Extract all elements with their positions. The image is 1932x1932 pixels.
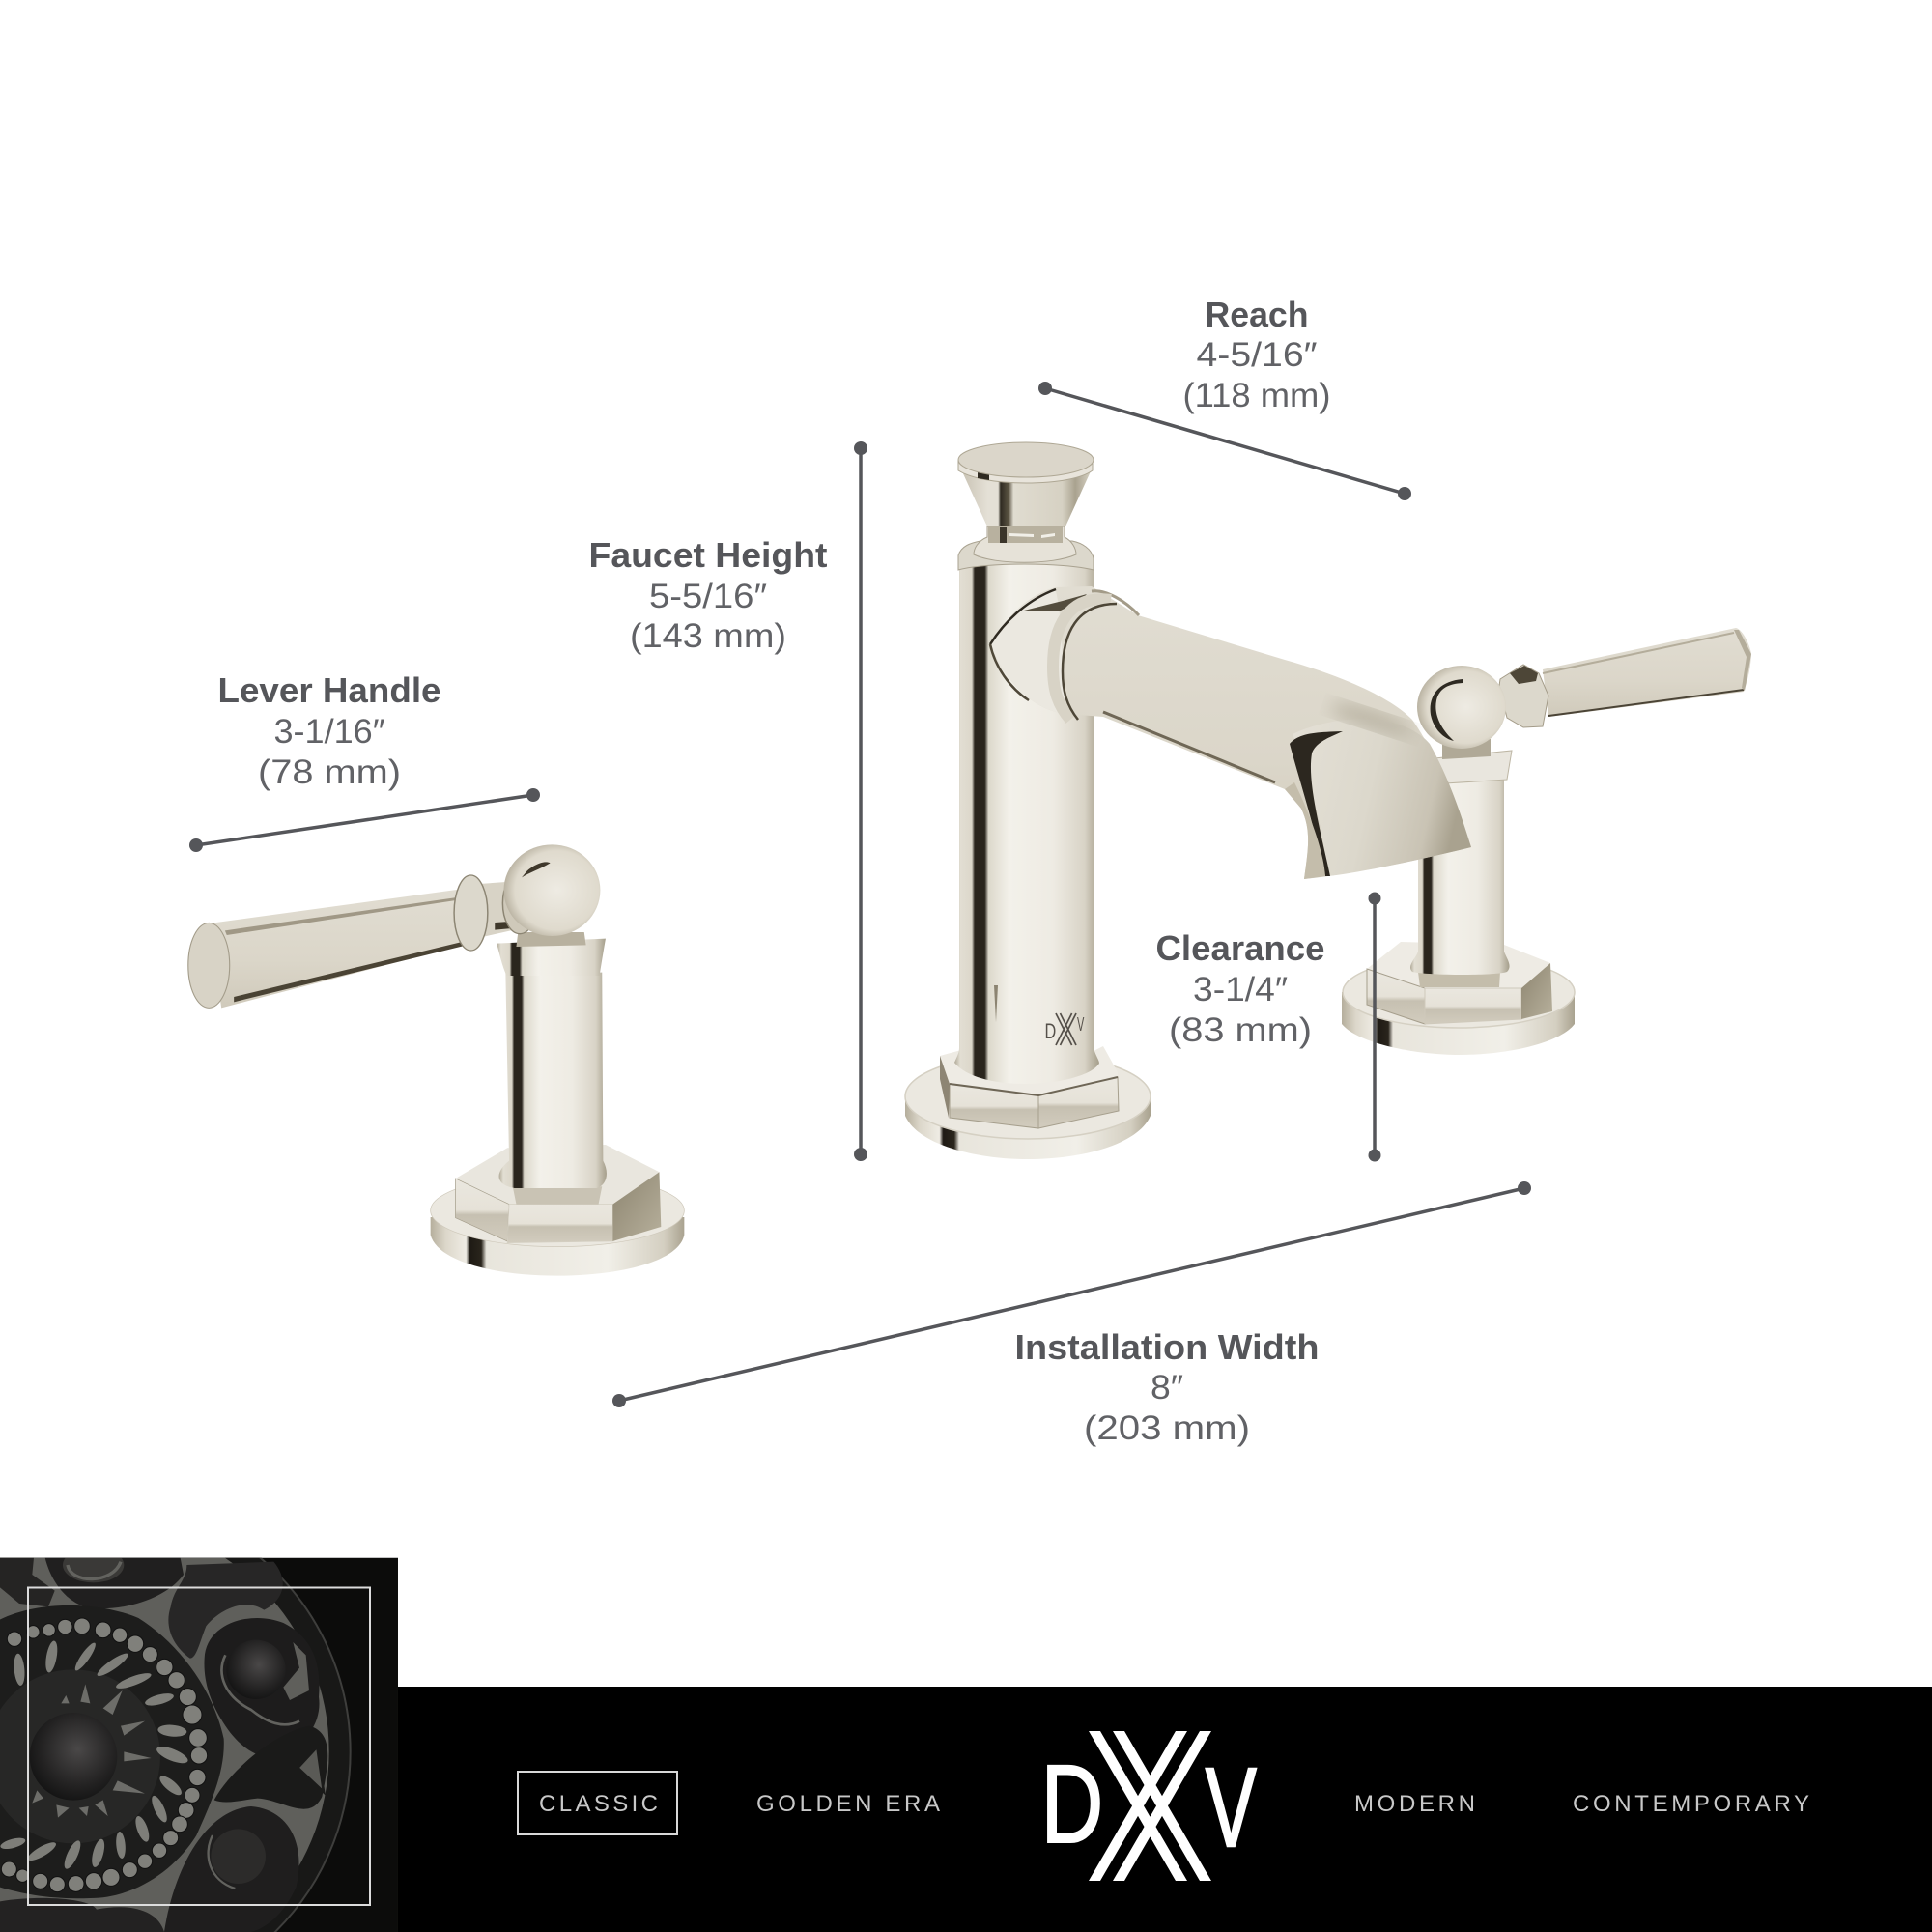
triangle pierced detail (298, 1747, 324, 1792)
left handle ball (504, 844, 600, 936)
engraved logo on faucet column: D (1045, 1020, 1056, 1044)
footer nav: golden era: GOLDEN ERA (756, 1791, 940, 1817)
pop-up drain knob (958, 442, 1094, 526)
medallion disc (0, 1557, 352, 1932)
central scalloped field (0, 1605, 224, 1898)
dimension text: installation width (1014, 1327, 1320, 1447)
dimension text: clearance: (83 mm) (1169, 1011, 1312, 1049)
right handle neck (1442, 739, 1491, 759)
dimension line: installation width (612, 1181, 1531, 1407)
dimension line: reach (1038, 382, 1411, 500)
dimension text: faucet height (589, 535, 828, 655)
dimension text: faucet height: Faucet Height (589, 535, 828, 575)
top rosette (44, 1557, 184, 1608)
dimension line: faucet height (854, 441, 867, 1161)
left handle hexagonal nut (456, 1145, 661, 1243)
right handle lower nub (1418, 972, 1500, 987)
dimension line: clearance (1368, 893, 1381, 1161)
dimension text: faucet height: 5-5/16″ (649, 578, 767, 615)
spout nose (1285, 697, 1471, 879)
dimension text: installation width: (203 mm) (1084, 1409, 1250, 1447)
footer nav: classic (selected) (518, 1772, 677, 1834)
right handle base disc (1342, 956, 1575, 1055)
lower-right acanthus leaves (214, 1726, 327, 1809)
dimension text: reach: (118 mm) (1182, 377, 1331, 414)
right handle stem collar (1425, 751, 1512, 784)
main column (954, 555, 1099, 1084)
collar dome (974, 526, 1076, 562)
dimension text: installation width: 8″ (1151, 1369, 1183, 1406)
dimension text: faucet height: (143 mm) (630, 617, 786, 655)
logo crossed X strands (1089, 1731, 1211, 1881)
dimension text: clearance (1155, 928, 1325, 1049)
dimension text: reach (1182, 295, 1331, 414)
DXV logo (1041, 1731, 1257, 1881)
main column collar (958, 541, 1094, 570)
right handle stem (1410, 778, 1510, 975)
spout bulge junction (990, 589, 1139, 720)
bead ring (1, 1618, 208, 1892)
right handle ball (1417, 666, 1506, 749)
footer nav: classic (selected): CLASSIC (539, 1791, 658, 1817)
top-left leaf (0, 1558, 55, 1606)
dimension line: lever handle (189, 788, 540, 852)
engraved logo on faucet column (1045, 1013, 1084, 1045)
spout underside highlight (1103, 712, 1275, 782)
dimension text: clearance: Clearance (1155, 928, 1325, 968)
dimension text: lever handle: Lever Handle (218, 670, 440, 710)
inner shadow of leaves (0, 1669, 160, 1843)
main hexagonal nut (940, 1046, 1119, 1128)
bottom leaves (0, 1898, 164, 1932)
main base disc (905, 1054, 1151, 1159)
upper leaf bud (168, 1562, 283, 1659)
faucet: left lever handle (188, 844, 684, 1276)
dimension text: reach: Reach (1206, 295, 1308, 334)
dimension text: lever handle: (78 mm) (258, 753, 401, 791)
left handle base disc (431, 1175, 684, 1276)
faucet: right lever handle (1342, 628, 1751, 1055)
black footer band (398, 1687, 1932, 1932)
dimension text: reach: 4-5/16″ (1196, 336, 1318, 374)
radiating leaves (0, 1640, 190, 1871)
faucet: main body and spout (905, 442, 1471, 1159)
dimension text: installation width: Installation Width (1014, 1327, 1320, 1367)
dimension text: clearance: 3-1/4″ (1193, 971, 1288, 1009)
right handle hexagonal nut (1367, 942, 1552, 1024)
bottom-right rosette (164, 1806, 298, 1932)
top-right rosette (204, 1618, 320, 1757)
spout body (990, 586, 1471, 879)
column streak (994, 985, 998, 1022)
right handle lever arm (1543, 628, 1751, 717)
footer nav: modern: MODERN (1354, 1791, 1475, 1817)
engraved logo on faucet column: V (1077, 1014, 1084, 1036)
central boss (30, 1713, 117, 1801)
central sun rays (32, 1684, 152, 1818)
left handle neck rings (454, 872, 537, 951)
right handle collar (1499, 665, 1548, 727)
dimension text: lever handle: 3-1/16″ (274, 713, 384, 751)
logo letter V: V (1206, 1746, 1257, 1871)
left handle lower nub (513, 1186, 602, 1205)
left handle lever arm (188, 888, 475, 1008)
left handle stem (499, 973, 607, 1188)
medallion inset frame (28, 1588, 370, 1905)
knob neck (988, 526, 1063, 543)
dimension text: lever handle (218, 670, 440, 791)
footer nav: contemporary: CONTEMPORARY (1573, 1791, 1809, 1817)
ornamental medallion photo (0, 1557, 398, 1932)
left handle neck under ball (516, 932, 586, 947)
left handle stem collar (497, 939, 606, 976)
logo letter D: D (1041, 1742, 1103, 1866)
